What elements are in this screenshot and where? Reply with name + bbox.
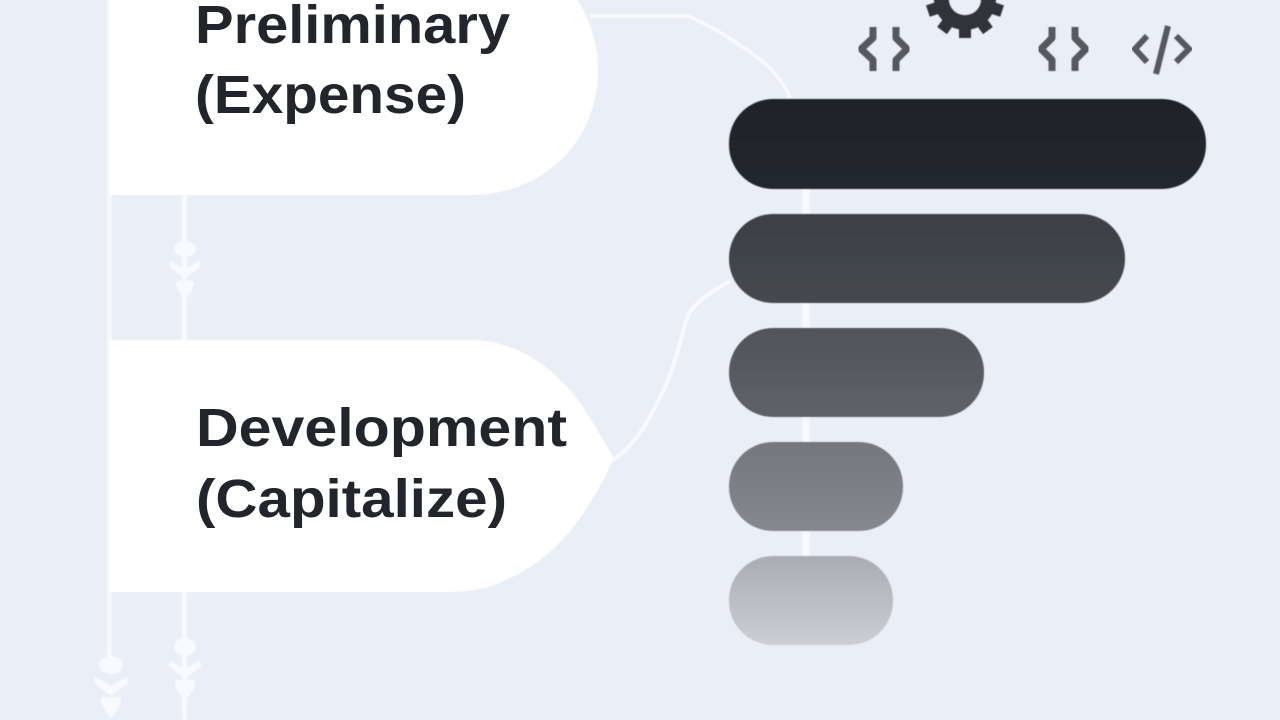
heading: preliminary — [195, 0, 510, 125]
heading: development: Development — [196, 398, 567, 458]
funnel chart — [729, 99, 1206, 645]
icon: code braces left — [861, 27, 907, 71]
connector curve: preliminary to funnel — [590, 16, 790, 98]
connector curve: development to funnel — [612, 281, 730, 461]
left vertical connector line — [107, 0, 112, 658]
icon: gear — [926, 0, 1004, 38]
lower connector with chevrons (left) — [94, 656, 128, 718]
heading: preliminary: (Expense) — [195, 65, 466, 125]
connector between panels with chevrons — [170, 195, 200, 341]
lower connector with chevrons (right) — [169, 590, 201, 720]
panel: preliminary expense — [110, 0, 598, 195]
heading: development — [196, 398, 567, 529]
heading: development: (Capitalize) — [196, 469, 507, 529]
icon: code closing tag — [1135, 26, 1189, 74]
icon: code braces right — [1041, 27, 1086, 71]
funnel spine — [802, 185, 810, 560]
panel: development capitalize — [110, 340, 614, 592]
